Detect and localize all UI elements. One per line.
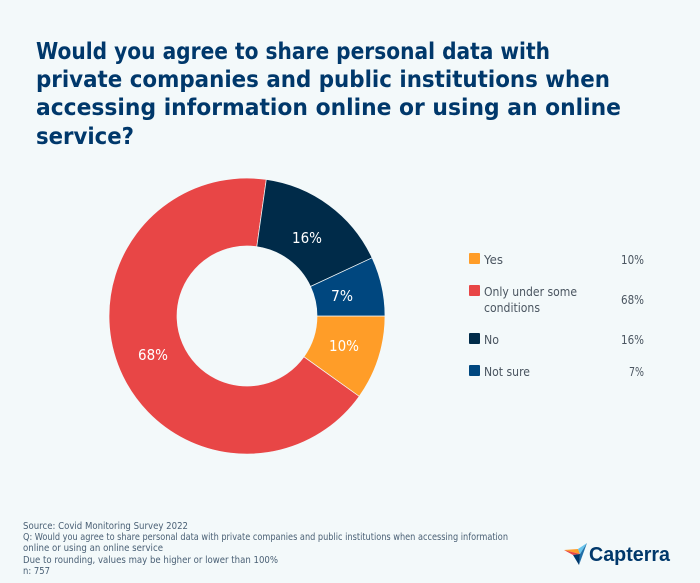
- legend item: No: No: [484, 332, 499, 347]
- legend item: Not sure: Not sure: [484, 364, 530, 379]
- legend: [469, 252, 644, 379]
- donut value labels: [138, 229, 359, 364]
- source notes: [23, 521, 508, 577]
- legend item: Not sure: 7%: [629, 364, 644, 379]
- legend item: Only under some conditions: 68%: [621, 292, 644, 307]
- logo: Capterra: [564, 543, 671, 566]
- donut value labels: 16%: [292, 229, 322, 247]
- source notes: online or using an online service: [23, 543, 163, 554]
- legend item: Only under some conditions: Only under some: [484, 284, 577, 299]
- slice: No 16%: [257, 179, 372, 286]
- donut value labels: 68%: [138, 346, 168, 364]
- legend item: Only under some conditions: [469, 284, 644, 315]
- source notes: Source: Covid Monitoring Survey 2022: [23, 521, 188, 532]
- slice: Not sure 7%: [310, 258, 385, 316]
- source notes: Q: Would you agree to share personal data with private companies and public institutions when accessing information: [23, 532, 508, 543]
- title: accessing information online or using an online: [36, 95, 621, 121]
- title: private companies and public institutions when: [36, 67, 610, 93]
- source notes: n: 757: [23, 566, 50, 577]
- legend item: No: [469, 332, 644, 347]
- legend item: Yes: 10%: [621, 252, 644, 267]
- legend item: Only under some conditions: conditions: [484, 300, 540, 315]
- donut chart: [109, 178, 385, 454]
- slice: Yes 10%: [304, 316, 385, 396]
- logo wordmark: Capterra: [589, 544, 671, 566]
- legend item: Not sure: [469, 364, 644, 379]
- legend item: No: 16%: [621, 332, 644, 347]
- title: Would you agree to share personal data with: [36, 39, 550, 65]
- icon: Capterra arrow: [564, 543, 587, 565]
- legend item: Yes: Yes: [483, 252, 503, 267]
- donut value labels: 7%: [331, 287, 353, 305]
- title: [36, 39, 621, 150]
- slice: Only under some conditions 68%: [109, 178, 359, 454]
- title: service?: [36, 124, 134, 150]
- source notes: Due to rounding, values may be higher or lower than 100%: [23, 555, 278, 566]
- legend item: Yes: [469, 252, 644, 267]
- donut value labels: 10%: [329, 337, 359, 355]
